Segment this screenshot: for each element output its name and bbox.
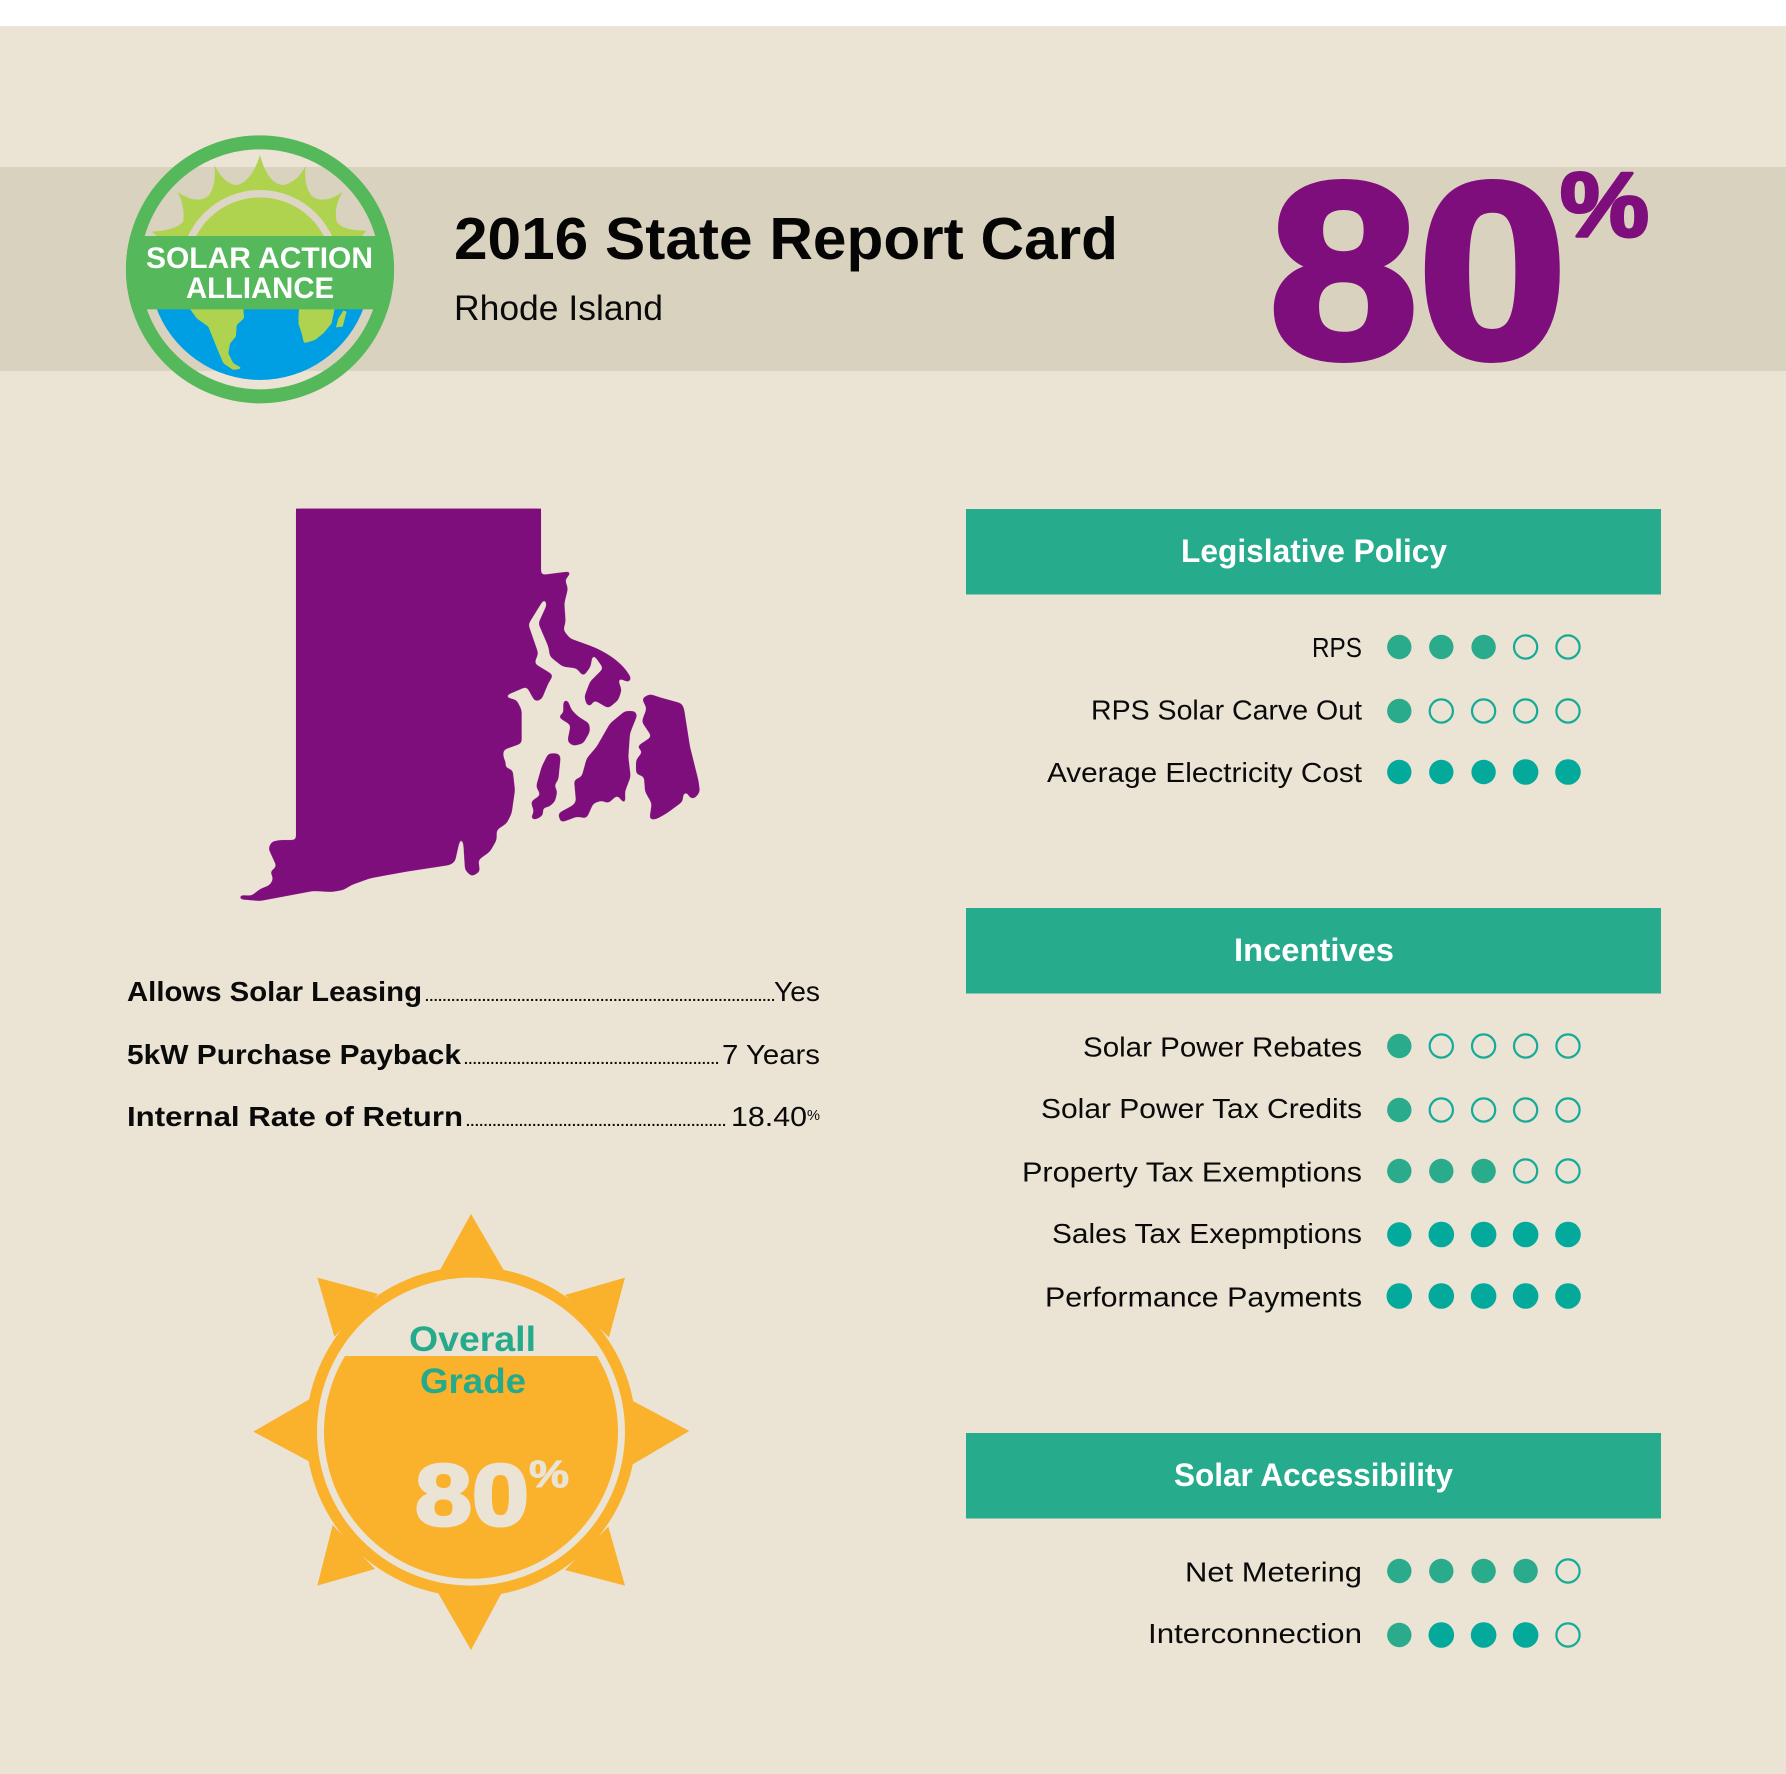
panel: legislative policy — [966, 509, 1661, 788]
badge score: 80 — [415, 1447, 529, 1544]
stat: purchase payback — [127, 1039, 820, 1070]
row: Solar Power Tax Credits — [1041, 1093, 1580, 1124]
stat: solar leasing: Allows Solar Leasing — [127, 976, 422, 1007]
row: Sales Tax Exepmptions: Sales Tax Exepmptions — [1052, 1218, 1362, 1249]
row: Solar Power Tax Credits: Solar Power Tax Credits — [1041, 1093, 1362, 1124]
logo sun body — [173, 182, 347, 357]
logo south america — [188, 307, 244, 370]
row: Solar Power Rebates — [1083, 1031, 1580, 1062]
panel header bar — [966, 1433, 1661, 1518]
row: Sales Tax Exepmptions — [1052, 1218, 1581, 1249]
badge label line 2: Grade — [420, 1362, 526, 1401]
panel header bar — [966, 509, 1661, 594]
row: Net Metering: Net Metering — [1185, 1556, 1362, 1587]
Aquidneck Island — [558, 711, 637, 823]
Prudence Island — [557, 699, 590, 746]
logo text line 1: SOLAR ACTION — [146, 242, 373, 275]
sun lower fill — [324, 1356, 618, 1579]
row: Net Metering — [1185, 1556, 1580, 1587]
stat: purchase payback: .......................................................... — [464, 1051, 719, 1067]
subtitle: state name: Rhode Island — [454, 289, 663, 328]
panel header bar — [966, 908, 1661, 994]
score percent sign: % — [1560, 154, 1649, 256]
sun outer disc — [306, 1267, 636, 1597]
stat: rate of return — [127, 1101, 820, 1132]
title: 2016 State Report Card — [454, 206, 1118, 272]
row: RPS Solar Carve Out: RPS Solar Carve Out — [1091, 694, 1362, 725]
badge percent sign: % — [529, 1454, 569, 1496]
logo earth ocean — [156, 307, 364, 380]
sun rays — [253, 1214, 689, 1650]
logo madagascar — [336, 311, 347, 327]
row: RPS Solar Carve Out — [1091, 694, 1580, 725]
logo text line 2: ALLIANCE — [186, 272, 334, 305]
stat: solar leasing: ................................................................................ — [425, 988, 775, 1004]
stat: solar leasing: Yes — [774, 976, 820, 1007]
Sakonnet peninsula — [636, 694, 700, 820]
panel heading: Incentives — [1234, 932, 1394, 968]
stat: rate of return: Internal Rate of Return — [127, 1101, 463, 1132]
map: Rhode Island — [239, 509, 700, 901]
stats list — [127, 976, 820, 1132]
logo sun disc — [188, 197, 332, 341]
stat: rate of return: 18.40 — [731, 1101, 807, 1132]
stat: purchase payback: 7 Years — [722, 1039, 820, 1070]
panel: solar accessibility — [966, 1433, 1661, 1649]
panel heading: Solar Accessibility — [1174, 1457, 1453, 1493]
sun cream ring — [317, 1278, 625, 1586]
logo sun halo — [181, 190, 339, 349]
logo: Solar Action Alliance — [126, 142, 394, 396]
row: RPS — [1312, 632, 1580, 663]
stat: rate of return: ........................................................... — [466, 1113, 726, 1129]
logo sun rays — [152, 155, 367, 238]
row: Property Tax Exemptions — [1022, 1156, 1580, 1187]
stat: purchase payback: 5kW Purchase Payback — [127, 1039, 461, 1070]
mainland and islands — [239, 509, 700, 901]
row: Performance Payments: Performance Payments — [1045, 1281, 1362, 1312]
score number: 80 — [1269, 131, 1567, 410]
panel: incentives — [966, 908, 1661, 1312]
row: Interconnection — [1148, 1618, 1580, 1649]
mainland — [239, 509, 632, 901]
row: Average Electricity Cost — [1047, 757, 1581, 788]
logo outer ring — [133, 142, 387, 396]
row: Average Electricity Cost: Average Electricity Cost — [1047, 757, 1362, 788]
row: Interconnection: Interconnection — [1148, 1618, 1362, 1649]
row: RPS: RPS — [1312, 632, 1362, 663]
badge label line 1: Overall — [409, 1320, 536, 1359]
logo banner — [126, 236, 394, 309]
Conanicut Island — [530, 753, 561, 819]
header band — [0, 167, 1786, 371]
panel heading: Legislative Policy — [1181, 533, 1447, 569]
row: Property Tax Exemptions: Property Tax Exemptions — [1022, 1156, 1362, 1187]
row: Solar Power Rebates: Solar Power Rebates — [1083, 1031, 1362, 1062]
overall grade sun badge — [253, 1214, 689, 1650]
logo africa — [298, 307, 335, 343]
mainland sharp corners — [296, 509, 541, 838]
stat: solar leasing — [127, 976, 820, 1007]
headline score — [1269, 131, 1649, 410]
row: Performance Payments — [1045, 1281, 1581, 1312]
stat: rate of return: % — [807, 1107, 820, 1124]
